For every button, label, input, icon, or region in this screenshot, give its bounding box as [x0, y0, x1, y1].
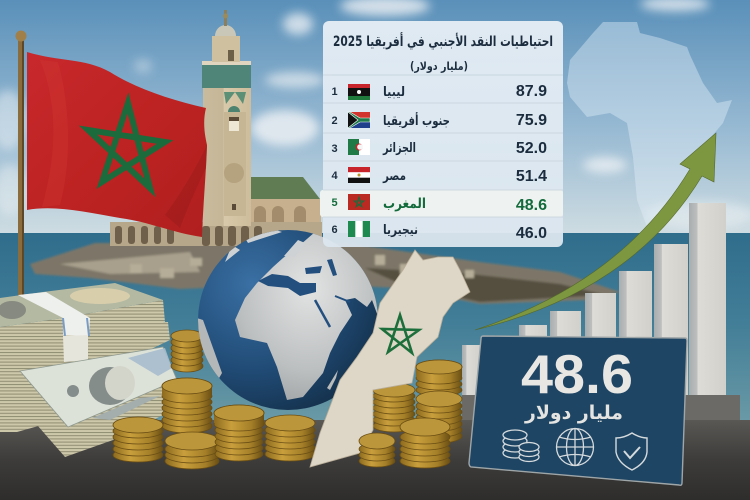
row 2: 75.9	[516, 112, 547, 129]
callout value: 48.6	[521, 343, 633, 405]
mosque side hall	[250, 177, 321, 225]
row 1: 1	[331, 86, 338, 98]
minaret dome	[215, 25, 236, 36]
table title: احتياطيات النقد الأجنبي في أفريقيا 2025	[333, 32, 553, 50]
flag pole	[16, 30, 26, 296]
portrait	[89, 366, 160, 420]
globe	[195, 228, 382, 410]
row 6	[331, 221, 547, 242]
minaret lantern	[212, 36, 240, 62]
icon: globe	[556, 428, 594, 466]
Morocco map cutout	[310, 250, 470, 467]
coin stack C	[113, 417, 163, 462]
banknote stacks back	[0, 283, 170, 432]
sky background	[0, 0, 750, 236]
mosque: Hassan II	[110, 10, 322, 246]
banknote stack front	[17, 347, 177, 457]
sea	[0, 233, 750, 423]
row 4: مصر	[382, 169, 406, 184]
highlighted Morocco row	[320, 190, 563, 217]
panel: reserves ranking table	[320, 21, 563, 247]
rocky coastline	[30, 243, 620, 304]
coin stack behind globe	[171, 330, 203, 372]
row 4: 51.4	[516, 168, 547, 185]
row 1	[331, 83, 547, 100]
minaret arch decoration	[224, 92, 246, 216]
clouds	[0, 0, 750, 229]
callout unit: مليار دولار	[524, 402, 623, 424]
coin stack B	[162, 378, 212, 433]
coin stack H	[373, 383, 415, 432]
growth arrow	[475, 133, 716, 330]
coin stack K	[400, 418, 450, 468]
Moroccan flag	[27, 52, 207, 237]
row 6: 46.0	[516, 225, 547, 242]
row 4	[331, 167, 547, 185]
coin stack G	[359, 433, 395, 467]
bar chart with base	[462, 203, 740, 420]
callout board	[469, 336, 687, 485]
row 5 Morocco highlighted	[331, 194, 547, 214]
ghost map of Africa	[567, 22, 732, 227]
continents	[235, 228, 382, 400]
row 3: 3	[331, 143, 338, 155]
top bundle sides	[0, 300, 165, 348]
minaret shaft	[203, 86, 251, 226]
icon: coins	[503, 430, 539, 462]
minaret green band	[202, 64, 251, 88]
row 3	[331, 139, 547, 157]
row 4: 4	[331, 170, 338, 182]
row 3: 52.0	[516, 140, 547, 157]
row 5 Morocco highlighted: 48.6	[516, 197, 547, 214]
Morocco star	[382, 315, 419, 353]
row 3: الجزائر	[382, 141, 416, 156]
coin stack I	[416, 360, 462, 396]
coin stacks left of map	[113, 378, 315, 469]
ground surface	[0, 420, 750, 500]
row 6: 6	[331, 224, 338, 236]
row 1: ليبيا	[383, 85, 405, 100]
row 2: 2	[331, 115, 338, 127]
table subtitle: (مليار دولار)	[410, 59, 468, 74]
top bundle banknote face	[0, 283, 163, 327]
row 5 Morocco highlighted: المغرب	[383, 196, 426, 212]
strap	[18, 292, 90, 336]
row 2: جنوب أفريقيا	[383, 112, 450, 129]
row 2	[331, 112, 547, 129]
coin stack D	[165, 432, 219, 469]
coin stacks behind map, right side	[373, 360, 462, 443]
icon: shield with check	[616, 433, 647, 470]
row 5 Morocco highlighted: 5	[331, 197, 338, 209]
row 1: 87.9	[516, 83, 547, 100]
lower bundle	[0, 370, 60, 432]
coin stack J	[416, 391, 462, 443]
row 6: نيجيريا	[383, 223, 418, 238]
coin stack E	[214, 405, 264, 461]
arcade base	[110, 222, 322, 246]
coin stacks in front of map	[359, 418, 450, 468]
coin stack F	[265, 415, 315, 461]
